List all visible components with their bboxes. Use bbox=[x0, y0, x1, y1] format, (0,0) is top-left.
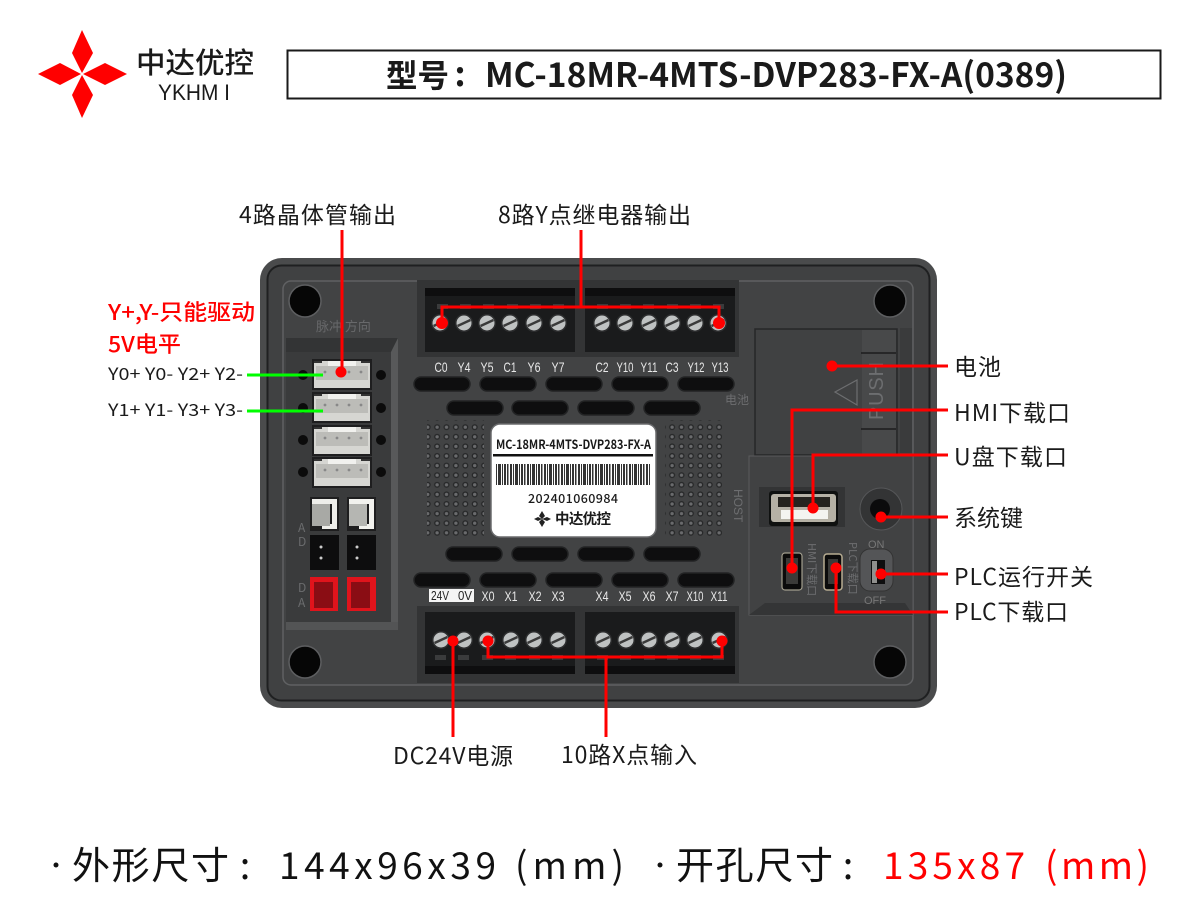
footer: outer size: (mm) bbox=[515, 836, 624, 890]
top terminal labels: Y6 bbox=[528, 359, 541, 375]
logo name: 中达优控 bbox=[136, 40, 254, 82]
callout: PLC run switch: PLC运行开关 bbox=[954, 558, 1093, 592]
top terminal labels: Y10 bbox=[616, 359, 634, 375]
label logo: 中达优控 bbox=[555, 508, 612, 529]
power and input labels: X2 bbox=[528, 588, 542, 604]
title: : bbox=[454, 47, 466, 96]
HMI mini USB port bbox=[782, 553, 802, 590]
title: MC-18MR-4MTS-DVP283-FX-A(0389) bbox=[485, 48, 1067, 97]
power and input labels: X3 bbox=[552, 588, 565, 604]
Y1 Y3 pins: Y1+ Y1- Y3+ Y3- bbox=[107, 396, 243, 421]
device back panel: HOST bbox=[731, 489, 745, 523]
run switch bbox=[860, 539, 893, 607]
footer: cutout size: : bbox=[843, 835, 853, 890]
top terminal labels: Y12 bbox=[688, 359, 705, 375]
callout: battery: 电池 bbox=[954, 348, 1001, 382]
callout: DC24V power: DC24V电源 bbox=[393, 737, 513, 771]
callout: 8-way relay output: 8路Y点继电器输出 bbox=[498, 196, 691, 230]
logo bbox=[38, 30, 254, 118]
AD DA connectors: A bbox=[298, 519, 306, 536]
power and input labels: X10 bbox=[686, 588, 704, 604]
callout: battery bbox=[826, 348, 1001, 382]
vent slots bbox=[414, 377, 734, 587]
push label: PUSH bbox=[866, 362, 888, 420]
product label bbox=[491, 424, 656, 537]
callout: 8-way relay output bbox=[436, 196, 725, 329]
port bay bbox=[749, 456, 913, 615]
pulse note bbox=[107, 295, 323, 421]
power and input labels: X6 bbox=[642, 588, 656, 604]
callout: system key: 系统键 bbox=[954, 499, 1023, 533]
callout: 10-way X input: 10路X点输入 bbox=[561, 736, 697, 770]
bottom terminal blocks bbox=[417, 606, 739, 683]
embossed port names: HMI下载口 bbox=[804, 543, 820, 596]
system key bbox=[860, 488, 902, 530]
footer: outer size: : bbox=[240, 835, 250, 890]
top terminal blocks bbox=[417, 280, 739, 357]
footer: cutout size bbox=[658, 835, 1149, 890]
power and input labels bbox=[429, 588, 728, 604]
top terminal labels: C1 bbox=[504, 359, 517, 375]
callout: HMI download port: HMI下载口 bbox=[954, 394, 1070, 428]
port bay: PLC下载口 bbox=[845, 542, 861, 595]
top terminal labels: C0 bbox=[434, 359, 448, 375]
top terminal labels: Y7 bbox=[552, 359, 565, 375]
footer: cutout size: 开孔尺寸 bbox=[676, 835, 833, 890]
power and input labels: 24V bbox=[431, 588, 449, 603]
top terminal labels: Y5 bbox=[480, 359, 494, 375]
left connector column bbox=[286, 338, 398, 630]
power and input labels: X11 bbox=[710, 588, 728, 604]
label model: MC-18MR-4MTS-DVP283-FX-A bbox=[496, 434, 652, 453]
embossed battery and host text: 电池 bbox=[725, 391, 749, 408]
embossed panel text: 脉冲 方向 bbox=[316, 316, 371, 335]
white pulse connectors bbox=[312, 359, 372, 488]
callout: system key bbox=[876, 499, 1023, 533]
icon: red four-point diamond mark bbox=[38, 30, 127, 118]
power and input labels: X1 bbox=[504, 588, 518, 604]
run switch: OFF bbox=[864, 595, 886, 607]
top terminal labels: Y11 bbox=[640, 359, 658, 375]
mounting holes bbox=[289, 285, 906, 678]
top terminal labels: Y13 bbox=[712, 359, 729, 375]
AD DA connectors: D bbox=[298, 579, 306, 596]
callout: 10-way X input bbox=[482, 636, 728, 770]
footer: outer size: 144x96x39 bbox=[279, 836, 496, 890]
callout: USB disk download port bbox=[808, 438, 1067, 514]
side dots bbox=[298, 370, 386, 477]
callout: 4-way transistor output: 4路晶体管输出 bbox=[239, 196, 396, 230]
AD DA connectors: A bbox=[298, 594, 306, 611]
power and input labels: X7 bbox=[666, 588, 679, 604]
footer: cutout size: 135x87 bbox=[883, 836, 1025, 890]
footer: outer size bbox=[54, 835, 624, 890]
AD DA connectors: D bbox=[298, 533, 306, 550]
title box bbox=[288, 47, 1160, 98]
footer: cutout size: (mm) bbox=[1045, 836, 1149, 890]
serial number: 202401060984 bbox=[528, 488, 618, 507]
callout: PLC download port: PLC下载口 bbox=[954, 593, 1068, 627]
device back panel bbox=[260, 258, 937, 708]
power and input labels: X5 bbox=[618, 588, 632, 604]
Y0 Y2 pins: Y0+ Y0- Y2+ Y2- bbox=[107, 360, 243, 385]
power and input labels: X0 bbox=[482, 588, 495, 604]
callout: HMI download port bbox=[786, 394, 1070, 574]
top terminal labels: C2 bbox=[596, 359, 609, 375]
callout: USB disk download port: U盘下载口 bbox=[954, 438, 1067, 472]
callout: DC24V power bbox=[393, 636, 513, 771]
callout: PLC run switch bbox=[876, 558, 1093, 592]
top terminal labels: C3 bbox=[666, 359, 679, 375]
pulse note: 5V电平 bbox=[108, 327, 181, 359]
AD DA connectors bbox=[298, 497, 376, 611]
barcode bbox=[496, 464, 650, 485]
callout: 4-way transistor output bbox=[239, 196, 396, 378]
PLC mini USB port bbox=[824, 554, 842, 590]
top terminal labels bbox=[434, 359, 729, 375]
USB host port bbox=[759, 487, 845, 527]
run switch: ON bbox=[868, 539, 885, 551]
battery cover bbox=[755, 328, 912, 455]
title: 型号 bbox=[386, 51, 449, 97]
top terminal labels: Y4 bbox=[458, 359, 471, 375]
logo latin name: YKHM I bbox=[158, 80, 230, 105]
footer: outer size: 外形尺寸 bbox=[72, 835, 229, 890]
power and input labels: 0V bbox=[458, 588, 472, 603]
callout: PLC download port bbox=[830, 562, 1068, 627]
speaker dot grids bbox=[427, 420, 722, 536]
pulse note: Y+,Y-只能驱动 bbox=[107, 295, 255, 327]
power and input labels: X4 bbox=[596, 588, 609, 604]
